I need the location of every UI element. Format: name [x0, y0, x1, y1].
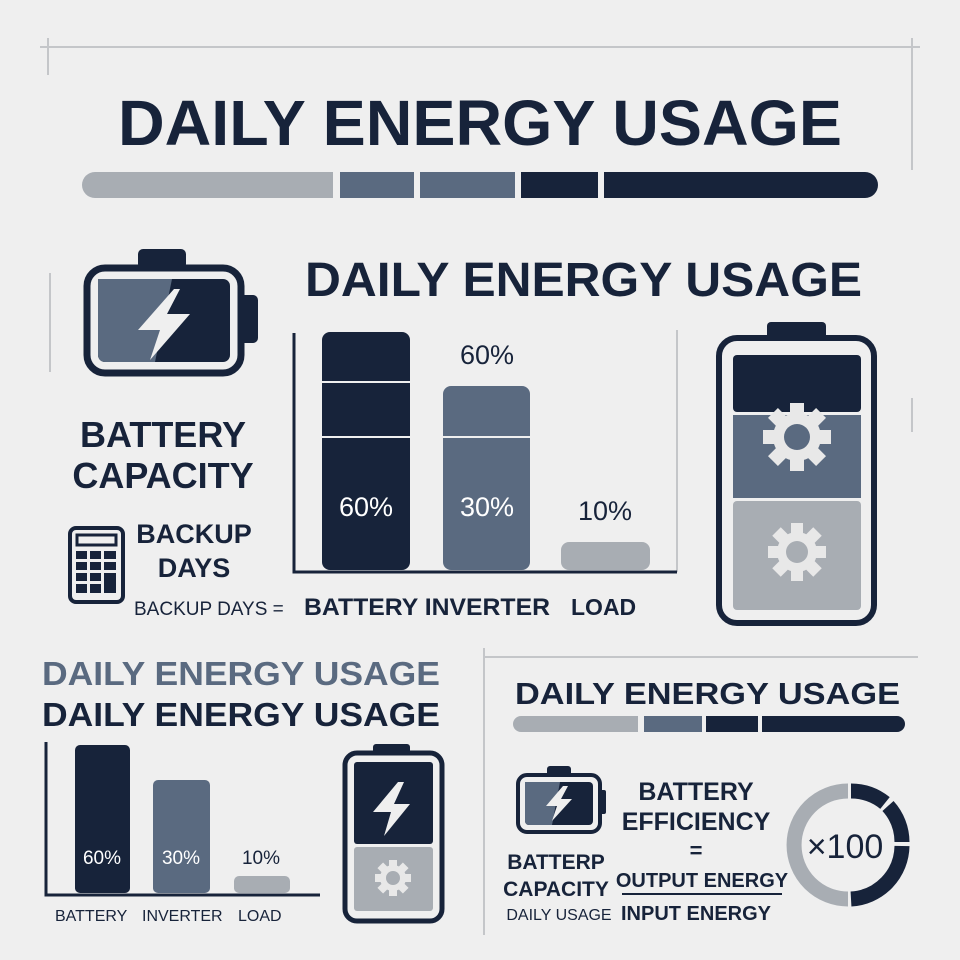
- text: backup days: [136, 519, 252, 583]
- text: battery capacity daily usage: BATTERP: [507, 851, 605, 874]
- bar chart small: [46, 742, 320, 925]
- icon: small battery: [345, 744, 442, 921]
- bar chart small: 60%: [83, 848, 121, 869]
- bar chart main: [294, 332, 677, 572]
- icon: battery with bolt: [87, 249, 258, 373]
- top progress bar: [82, 172, 878, 198]
- formula: battery efficiency: INPUT ENERGY: [621, 903, 772, 925]
- bar chart small: 30%: [162, 848, 200, 869]
- bar chart small: LOAD: [238, 908, 282, 925]
- formula: battery efficiency: BATTERY: [638, 778, 754, 806]
- bar chart main: 10%: [578, 496, 632, 526]
- icon: battery with gears: [719, 322, 874, 623]
- text: backup days: BACKUP: [136, 519, 252, 549]
- bar chart main: 60%: [460, 340, 514, 370]
- formula: backup days: BACKUP DAYS =: [134, 599, 284, 620]
- formula: battery efficiency: =: [690, 838, 702, 863]
- text: battery capacity daily usage: DAILY USAGE: [506, 907, 612, 924]
- donut chart x100: [794, 791, 902, 899]
- text: battery capacity: [72, 414, 254, 496]
- formula: backup days: BATTERY INVERTER: [304, 594, 550, 621]
- text: battery capacity daily usage: [503, 851, 612, 924]
- text: backup days: DAYS: [158, 553, 230, 583]
- heading: bottom left: DAILY ENERGY USAGE: [42, 655, 440, 692]
- bottom right progress bar: [513, 716, 905, 732]
- icon: calculator: [70, 528, 123, 602]
- heading: bottom left: DAILY ENERGY USAGE: [42, 696, 440, 733]
- text: battery capacity: CAPACITY: [72, 455, 254, 496]
- bar chart main: 60%: [339, 492, 393, 522]
- formula: battery efficiency: EFFICIENCY: [622, 808, 771, 836]
- bar chart main: 30%: [460, 492, 514, 522]
- formula: backup days: LOAD: [571, 594, 636, 620]
- text: battery capacity daily usage: CAPACITY: [503, 878, 609, 901]
- bar chart small: 10%: [242, 848, 280, 869]
- icon: battery small right: [518, 766, 606, 832]
- formula: backup days: [134, 594, 636, 621]
- bar chart small: INVERTER: [142, 908, 223, 925]
- text: battery capacity: BATTERY: [80, 414, 246, 455]
- bar chart small: BATTERY: [55, 908, 128, 925]
- heading: bottom left: [42, 655, 440, 733]
- donut chart x100: ×100: [807, 828, 883, 866]
- title: DAILY ENERGY USAGE: [118, 87, 842, 159]
- heading: bottom right: DAILY ENERGY USAGE: [515, 676, 900, 711]
- heading 2: DAILY ENERGY USAGE: [305, 254, 862, 307]
- formula: battery efficiency: [616, 778, 789, 925]
- formula: battery efficiency: OUTPUT ENERGY: [616, 870, 789, 892]
